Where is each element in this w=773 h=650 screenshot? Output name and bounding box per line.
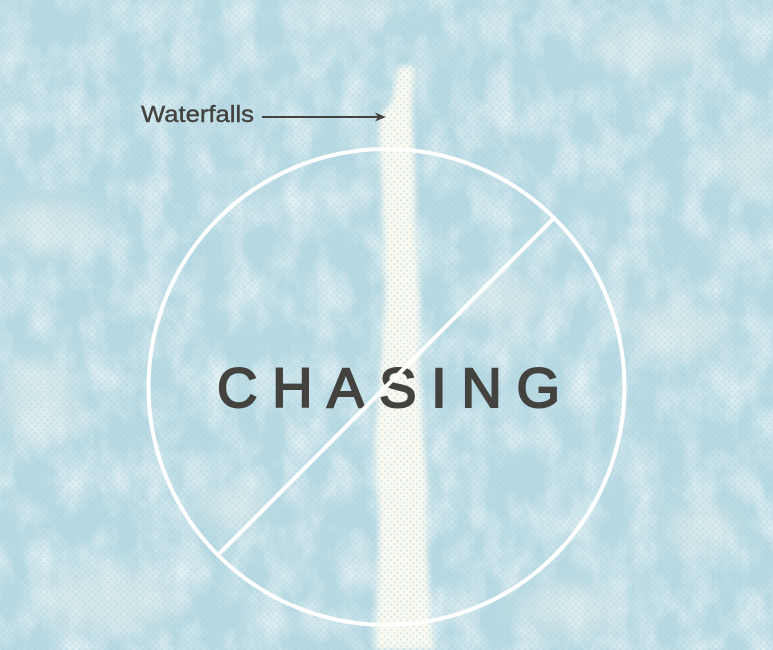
prohibition sign: circle with diagonal slash bbox=[148, 149, 624, 625]
arrow: label to waterfall bbox=[262, 112, 386, 122]
waterfall bbox=[374, 66, 434, 650]
label: Waterfalls: Waterfalls bbox=[141, 101, 254, 127]
heading: CHASING: CHASING bbox=[217, 356, 560, 419]
